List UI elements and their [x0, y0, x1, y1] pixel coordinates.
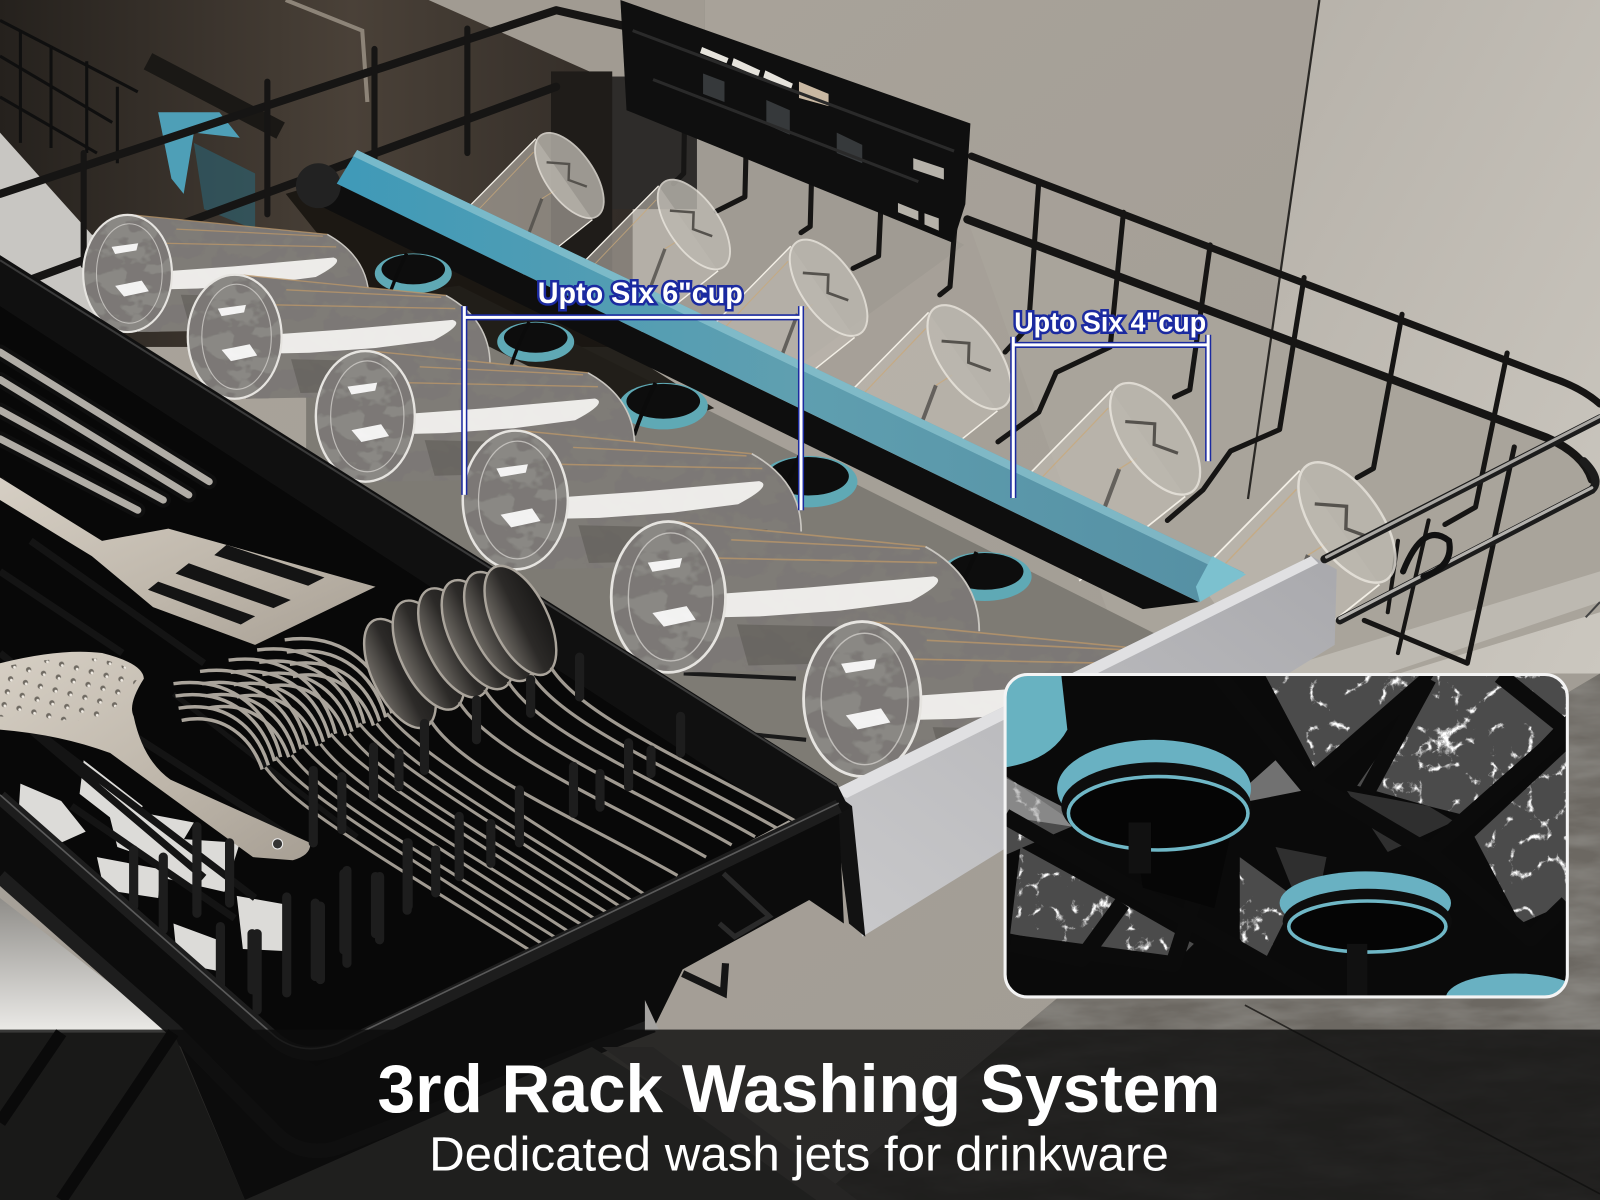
spatula: [0, 478, 376, 645]
cutlery tray: [0, 255, 849, 1082]
inset black rack wires: [1006, 676, 1566, 970]
wash jets under the bar: [375, 253, 1032, 607]
bottom caption band: [0, 1030, 1600, 1200]
inset: wash jets close-up: [1005, 674, 1585, 1022]
inset upper jet ring: [1057, 740, 1251, 852]
dishwasher interior: [0, 0, 1235, 816]
callout: six 4 inch cups: Upto Six 4"cup: [1014, 307, 1206, 338]
teal spray arm bar: [296, 150, 1246, 609]
skimmer spoon: [0, 652, 310, 860]
stainless rack handle: [832, 556, 1337, 937]
rack clip frame: [620, 0, 970, 243]
inset third jet ring: [1446, 974, 1565, 996]
callout: six 6 inch cups: [464, 277, 801, 510]
right side silver rack rails: [1324, 416, 1600, 620]
spoons: [349, 555, 798, 876]
subtitle: Dedicated wash jets for drinkware: [429, 1128, 1169, 1181]
stone floor: [816, 673, 1600, 1200]
tray wire grid: [0, 480, 357, 918]
angled drinking cups: [451, 121, 1420, 676]
lower scene under the caption band: [0, 1033, 857, 1200]
forks: [173, 639, 664, 957]
upper rack at back left: [0, 0, 367, 163]
callout: six 4 inch cups: [1013, 307, 1208, 498]
white dishes seen through the tray grid: [18, 760, 284, 971]
serving rods: [0, 352, 209, 510]
inset lower jet ring: [1280, 871, 1451, 954]
inset water spray patches: [1006, 676, 1566, 956]
title: 3rd Rack Washing System: [378, 1052, 1220, 1127]
callout: six 6 inch cups: Upto Six 6"cup: [538, 277, 743, 310]
black wire rack: [0, 10, 1600, 663]
tray pegs: [134, 657, 681, 1010]
inset teal corner: [1005, 674, 1067, 767]
horizontal glass cups: [83, 215, 1181, 776]
tray front rim: [0, 795, 844, 1200]
